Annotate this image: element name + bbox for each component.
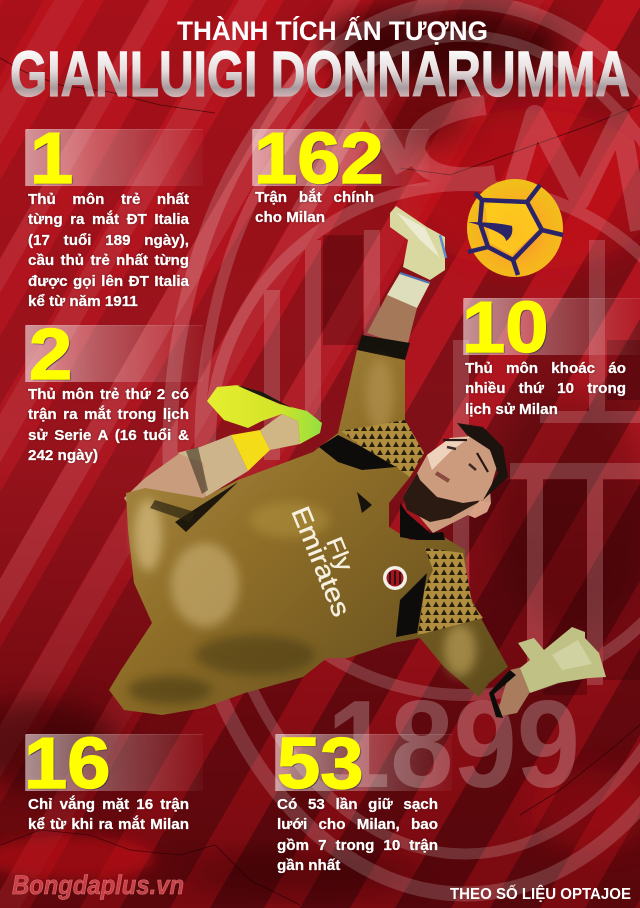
player: left leg and boot <box>124 385 322 515</box>
player: raised arm and glove <box>357 206 446 360</box>
stat panel: 1: (17 tuổi 189 ngày), <box>28 232 189 249</box>
stat panel: 53: lưới cho Milan, bao <box>277 816 438 833</box>
player: right arm and glove <box>489 627 606 718</box>
stat panel: 53: Có 53 lần giữ sạch <box>277 796 438 813</box>
stat panel: 16: 16 <box>24 724 111 804</box>
stat panel: 1: Thủ môn trẻ nhất <box>28 191 189 208</box>
icon: club badge on jersey <box>383 566 407 590</box>
stat panel: 10 <box>462 288 640 418</box>
stat panel: 162: Trận bắt chính <box>255 189 374 206</box>
stat panel: 53 <box>275 724 452 874</box>
stat panel: 2: Thủ môn trẻ thứ 2 có <box>28 386 189 403</box>
player: jersey and shorts <box>109 350 508 715</box>
stat panel: 2: 2 <box>29 315 72 395</box>
stat panel: 1: từng ra mắt ĐT Italia <box>28 211 189 228</box>
player: face and hair <box>403 423 508 533</box>
stat panel: 1: kể từ năm 1911 <box>28 293 138 310</box>
stat panel: 16: Chỉ vắng mặt 16 trận <box>28 796 189 813</box>
logo: Bongdaplus.vn: Bongdaplus.vn <box>12 870 184 900</box>
stat panel: 53: 53 <box>277 724 364 804</box>
stat panel: 16: kể từ khi ra mắt Milan <box>28 816 189 833</box>
jersey sponsor text: Fly <box>321 533 358 575</box>
jersey sponsor text: Emirates <box>285 502 357 621</box>
stat panel: 10: 10 <box>462 288 549 368</box>
stat panel: 2: trận ra mắt trong lịch <box>28 406 189 423</box>
stat panel: 2 <box>25 315 203 464</box>
stat panel: 16 <box>24 724 203 833</box>
source credit: THEO SỐ LIỆU OPTAJOE <box>450 883 631 903</box>
stat panel: 2: 242 ngày) <box>28 447 98 464</box>
stat panel: 162 <box>252 119 429 226</box>
icon: match ball <box>467 179 563 277</box>
stat panel: 1: được gọi lên ĐT Italia <box>28 273 189 290</box>
title: subtitle and player name: THÀNH TÍCH ẤN TƯỢNG <box>177 15 488 46</box>
stat panel: 1 <box>25 119 203 310</box>
stat panel: 53: gồm 7 trong 10 trận <box>277 837 438 854</box>
stat panel: 10: Thủ môn khoác áo <box>465 360 626 377</box>
stat panel: 2: sử Serie A (16 tuổi & <box>28 427 189 444</box>
stat panel: 53: gần nhất <box>277 857 340 874</box>
stat panel: 10: lịch sử Milan <box>465 401 558 418</box>
stat panel: 1: cầu thủ trẻ nhất từng <box>28 252 189 269</box>
stat panel: 162: cho Milan <box>255 209 325 226</box>
stat panel: 10: nhiều thứ 10 trong <box>465 380 626 397</box>
stat panel: 1: 1 <box>30 119 73 199</box>
background: red diagonal stripes and AC Milan crest watermark: 1899 <box>327 676 580 814</box>
stat panel: 162: 162 <box>254 119 384 199</box>
ACM letters of crest, drawn as strokes <box>300 100 640 230</box>
